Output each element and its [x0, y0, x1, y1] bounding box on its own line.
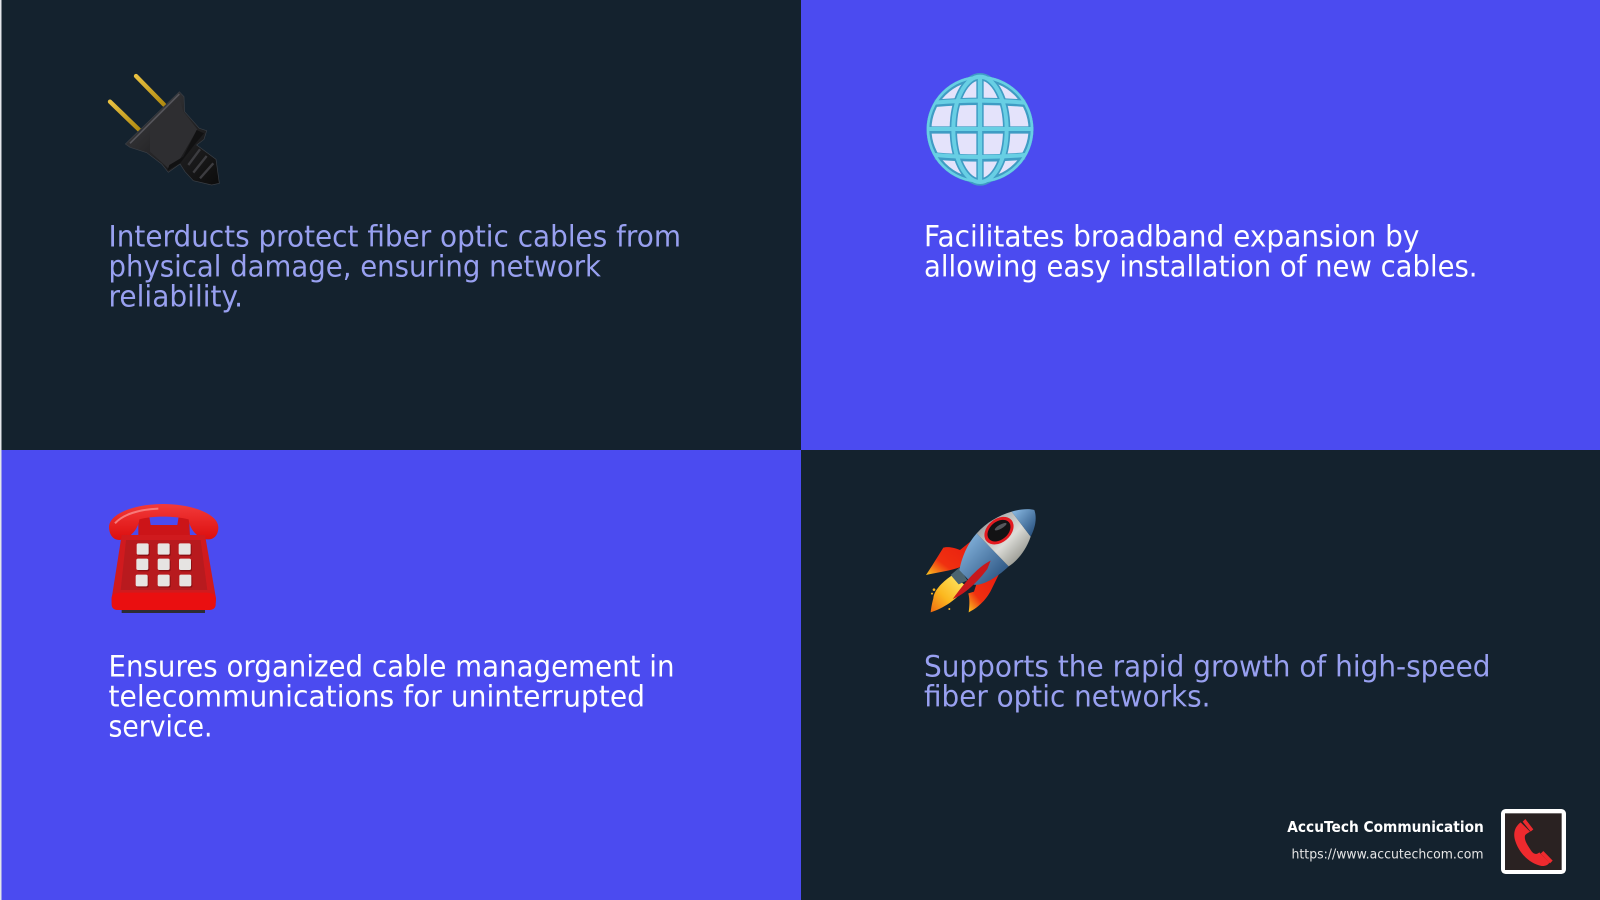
panel: cable management	[0, 450, 801, 900]
text: growth benefit: Supports the rapid growth of high-speed	[924, 650, 1490, 684]
text: broadband benefit: allowing easy installation of new cables.	[924, 250, 1478, 284]
icon: red telephone	[109, 504, 218, 613]
text: management benefit: telecommunications for uninterrupted	[108, 680, 645, 714]
text: protection benefit	[108, 220, 681, 314]
brand url: https://www.accutechcom.com	[1292, 846, 1484, 862]
brand footer	[1287, 809, 1566, 874]
text: growth benefit: fiber optic networks.	[924, 680, 1210, 714]
icon: rocket	[926, 509, 1036, 612]
panel: broadband expansion	[801, 0, 1600, 450]
text: management benefit: service.	[108, 710, 212, 744]
panel: network growth	[801, 450, 1600, 900]
text: protection benefit: physical damage, ensuring network	[108, 250, 601, 284]
left edge strip	[0, 0, 2, 900]
panel: cable protection	[0, 0, 801, 450]
text: protection benefit: Interducts protect fiber optic cables from	[108, 220, 681, 254]
text: growth benefit	[924, 650, 1490, 714]
text: management benefit: Ensures organized cable management in	[108, 650, 674, 684]
brand name: AccuTech Communication	[1287, 818, 1484, 836]
icon: logo phone	[1501, 809, 1566, 874]
text: protection benefit: reliability.	[108, 280, 243, 314]
icon: globe	[927, 76, 1033, 183]
text: broadband benefit	[924, 220, 1478, 284]
text: broadband benefit: Facilitates broadband expansion by	[924, 220, 1420, 254]
text: management benefit	[108, 650, 674, 744]
icon: electric plug	[110, 76, 219, 185]
